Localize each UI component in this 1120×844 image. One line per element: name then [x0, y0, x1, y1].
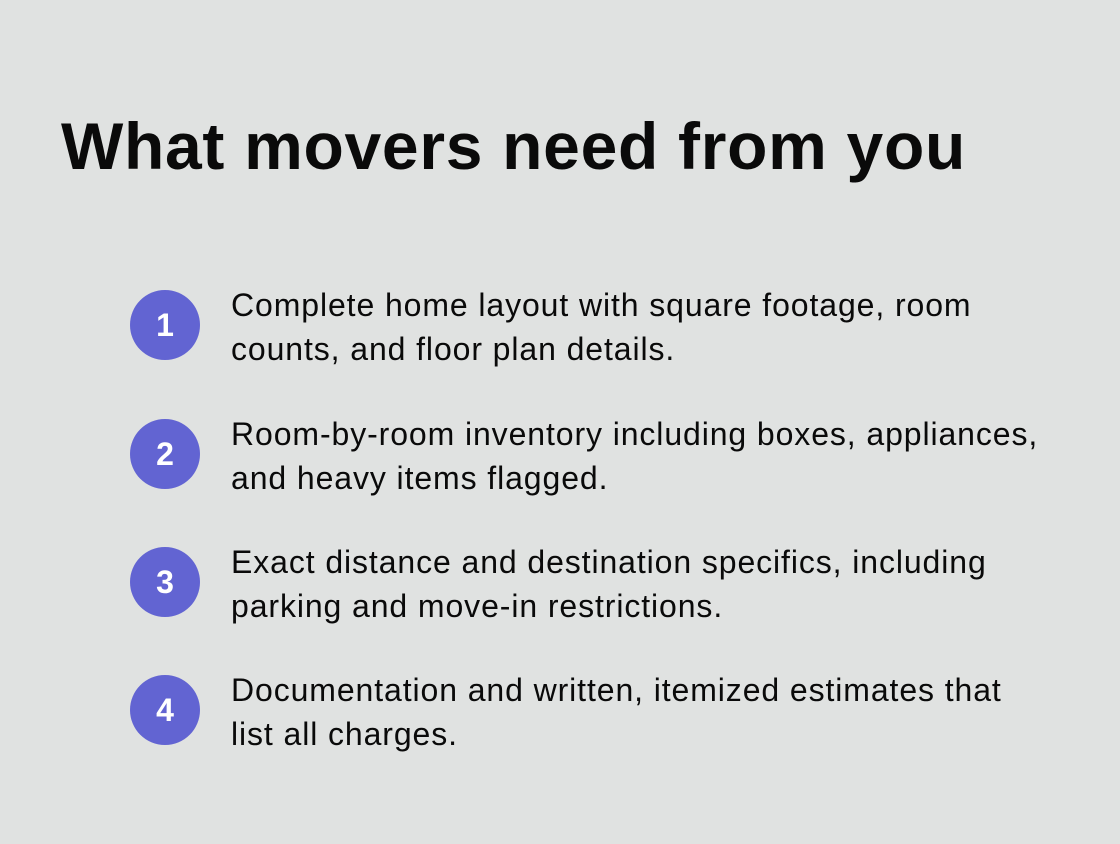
- icon: number 2: [130, 419, 200, 489]
- text 4: [231, 672, 1002, 752]
- text 4: Documentation and written, itemized estimates that: [231, 672, 1002, 708]
- text 1: Complete home layout with square footage, room: [231, 287, 971, 323]
- icon: number 1: 1: [156, 307, 174, 343]
- text 3: Exact distance and destination specifics, including: [231, 544, 987, 580]
- text 3: [231, 544, 987, 624]
- icon: number 4: 4: [156, 692, 174, 728]
- icon: number 4: [130, 675, 200, 745]
- text 4: list all charges.: [231, 716, 458, 752]
- text 1: [231, 287, 971, 367]
- item 3: [130, 544, 987, 624]
- text 2: [231, 416, 1038, 496]
- item 4: [130, 672, 1002, 752]
- icon: number 1: [130, 290, 200, 360]
- text 2: and heavy items flagged.: [231, 460, 608, 496]
- text 1: counts, and floor plan details.: [231, 331, 675, 367]
- text 2: Room-by-room inventory including boxes, appliances,: [231, 416, 1038, 452]
- item 1: [130, 287, 971, 367]
- icon: number 3: [130, 547, 200, 617]
- text 3: parking and move-in restrictions.: [231, 588, 723, 624]
- icon: number 2: 2: [156, 436, 174, 472]
- item 2: [130, 416, 1038, 496]
- title: What movers need from you: [61, 109, 966, 183]
- icon: number 3: 3: [156, 564, 174, 600]
